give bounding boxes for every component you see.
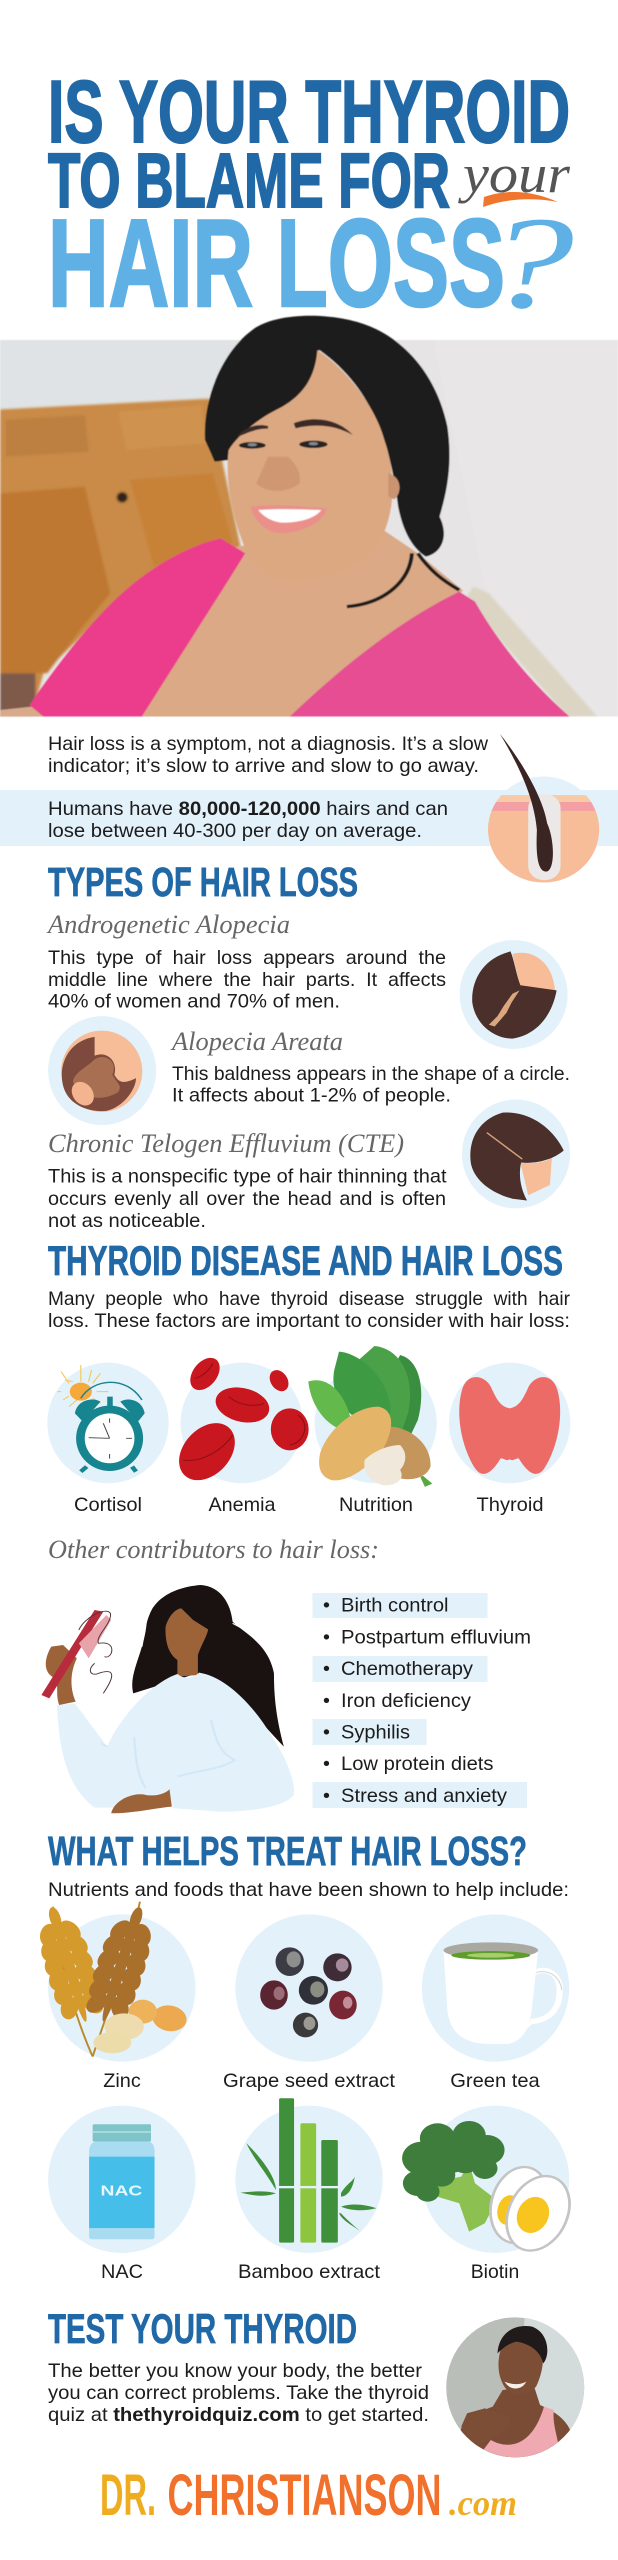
factors row: [47, 1346, 570, 1516]
type: chronic telogen effluvium: occurs evenly all over the head and is often: [48, 1188, 446, 1210]
label: zinc: Zinc: [103, 2070, 141, 2092]
logo: dr christianson dot com: .com: [449, 2483, 517, 2523]
list: other contributors: •: [323, 1722, 330, 1744]
thyroid intro text: loss. These factors are important to consider with hair loss:: [48, 1310, 570, 1332]
pink top right: [290, 592, 570, 717]
photo: woman touching her neck: [445, 2317, 585, 2458]
quiz text: quiz at thethyroidquiz.com to get started.: [48, 2404, 429, 2426]
title: TO BLAME FOR: [48, 138, 450, 224]
type: chronic telogen effluvium: [48, 1129, 447, 1232]
icon: zinc wheat and beans: [25, 1901, 196, 2062]
face: [228, 350, 393, 580]
logo: dr christianson dot com: DR.: [100, 2463, 156, 2528]
list: other contributors: •: [323, 1690, 330, 1712]
icon: biotin broccoli and egg: [402, 2106, 580, 2257]
type: androgenetic alopecia: Androgenetic Alopecia: [46, 910, 290, 939]
list: other contributors: Birth control: [341, 1594, 448, 1616]
thyroid intro text: [48, 1288, 570, 1332]
list: other contributors: •: [323, 1594, 330, 1616]
icon: anemia red blood cells: [168, 1354, 309, 1489]
highlight band with hair stat: [0, 790, 618, 846]
icon: green tea cup: [422, 1914, 569, 2062]
label: thyroid: Thyroid: [476, 1494, 544, 1516]
list: other contributors: Low protein diets: [341, 1753, 494, 1775]
intro text: [48, 733, 489, 777]
list: other contributors: Chemotherapy: [341, 1658, 473, 1680]
quiz text: you can correct problems. Take the thyroid: [48, 2382, 429, 2404]
type: chronic telogen effluvium: Chronic Telogen Effluvium (CTE): [48, 1129, 404, 1158]
icon: bamboo extract: [235, 2098, 383, 2253]
icon: NAC supplement bottle: NAC: [101, 2183, 143, 2199]
type: alopecia areata: [170, 1027, 570, 1106]
type: alopecia areata: It affects about 1-2% of people.: [172, 1084, 451, 1106]
list: other contributors: Iron deficiency: [341, 1690, 471, 1712]
icon: head with part-line thinning: [460, 940, 568, 1049]
list: other contributors: •: [323, 1626, 330, 1648]
type: chronic telogen effluvium: not as noticeable.: [48, 1210, 206, 1232]
intro text: Hair loss is a symptom, not a diagnosis. It’s a slow: [48, 733, 489, 755]
list: other contributors: Stress and anxiety: [341, 1785, 507, 1807]
logo: dr christianson dot com: CHRISTIANSON: [168, 2463, 442, 2528]
icon: nutrition spinach potato mushroom: [308, 1346, 437, 1485]
type: androgenetic alopecia: middle line where the hair parts. It affects: [48, 969, 446, 991]
list: other contributors: Postpartum effluvium: [341, 1626, 531, 1648]
illustration: woman holding comb with lost hair: [41, 1581, 294, 1813]
title: [48, 62, 574, 336]
label: biotin: Biotin: [471, 2261, 519, 2283]
label: green tea: Green tea: [450, 2070, 540, 2092]
list: other contributors: Syphilis: [341, 1722, 410, 1744]
icon: NAC supplement bottle: [48, 2106, 196, 2253]
photo: smiling woman in pink top: [0, 316, 618, 717]
highlight band with hair stat: Humans have 80,000-120,000 hairs and can: [48, 798, 448, 820]
icon: cortisol alarm clock: [47, 1363, 169, 1483]
label: NAC: NAC: [101, 2261, 143, 2283]
pink top left: [30, 538, 245, 717]
brows and eyes: [237, 419, 353, 437]
treatments intro: Nutrients and foods that have been shown to help include:: [48, 1879, 569, 1901]
title: ?: [485, 189, 574, 336]
icon: head with diffuse thinning: [462, 1100, 570, 1208]
type: chronic telogen effluvium: This is a nonspecific type of hair thinning that: [48, 1166, 447, 1188]
label: nutrition: Nutrition: [339, 1494, 413, 1516]
type: androgenetic alopecia: 40% of women and 70% of men.: [48, 990, 340, 1012]
icon: grape seed extract: [235, 1914, 383, 2062]
treatments grid: [25, 1901, 580, 2283]
skin neck and chest: [142, 527, 463, 717]
intro text: indicator; it’s slow to arrive and slow to go away.: [48, 755, 479, 777]
highlight band with hair stat: lose between 40-300 per day on average.: [48, 820, 422, 842]
fringe: [208, 342, 317, 462]
smile: [250, 505, 327, 533]
hair: [205, 316, 450, 557]
icon: head with circular patches: [48, 1016, 156, 1125]
subheading: other contributors: Other contributors to hair loss:: [48, 1535, 379, 1564]
label: grape seed extract: Grape seed extract: [223, 2070, 396, 2092]
list: other contributors: •: [323, 1753, 330, 1775]
label: bamboo extract: Bamboo extract: [238, 2261, 381, 2283]
type: androgenetic alopecia: This type of hair loss appears around the: [48, 947, 446, 969]
heading: types of hair loss: TYPES OF HAIR LOSS: [48, 859, 358, 905]
label: anemia: Anemia: [208, 1494, 276, 1516]
quiz text: [48, 2360, 429, 2426]
type: alopecia areata: Alopecia Areata: [170, 1027, 343, 1056]
type: alopecia areata: This baldness appears in the shape of a circle.: [172, 1063, 570, 1085]
quiz text: The better you know your body, the better: [48, 2360, 422, 2382]
list: other contributors: •: [323, 1785, 330, 1807]
list: other contributors: [312, 1593, 531, 1808]
heading: test your thyroid: TEST YOUR THYROID: [48, 2305, 357, 2352]
label: cortisol: Cortisol: [74, 1494, 142, 1516]
script word your: your: [458, 144, 571, 204]
icon: thyroid gland: [449, 1363, 570, 1483]
type: androgenetic alopecia: [46, 910, 446, 1012]
icon: hair follicle: [485, 734, 603, 887]
thyroid intro text: Many people who have thyroid disease struggle with hair: [48, 1288, 570, 1310]
list: other contributors: •: [323, 1658, 330, 1680]
logo: dr christianson dot com: [100, 2463, 517, 2528]
